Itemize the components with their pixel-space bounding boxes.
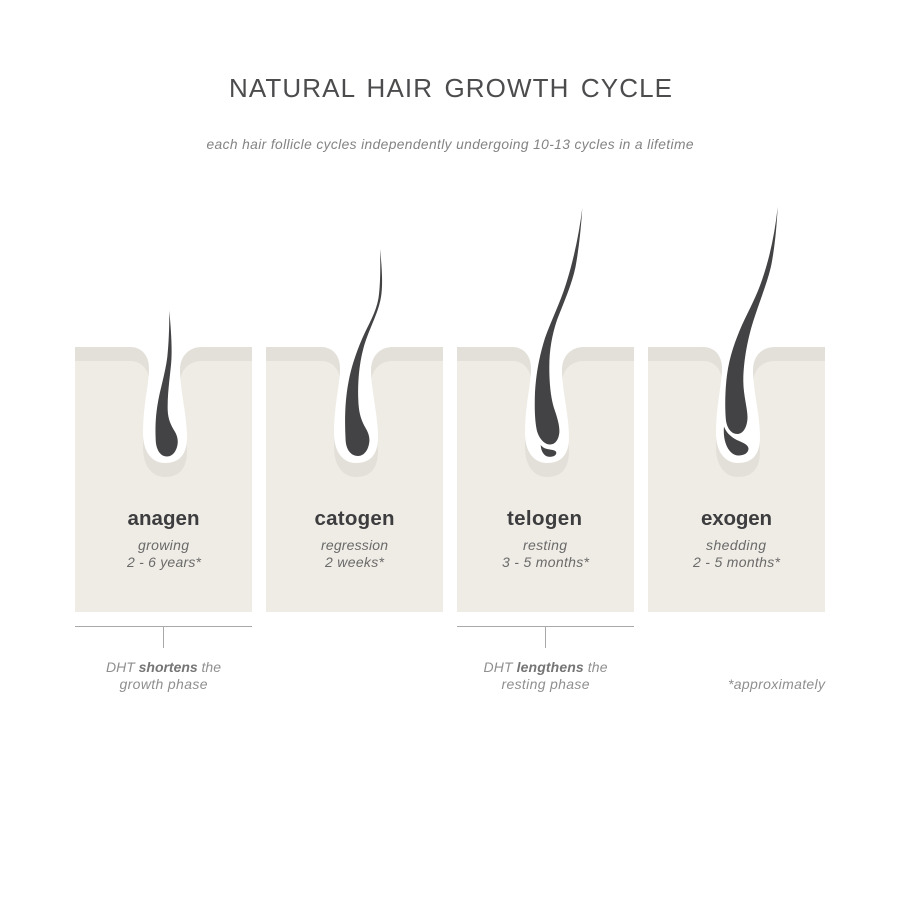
icon: exogen hair bbox=[725, 207, 778, 434]
panel: catogen bbox=[266, 249, 443, 612]
callout: DHT lengthens: DHT lengthens the bbox=[484, 659, 608, 675]
label: catogen description: regression bbox=[321, 537, 388, 553]
callout: growth phase: growth phase bbox=[120, 676, 208, 692]
label: anagen description: growing bbox=[138, 537, 189, 553]
label: exogen name: exogen bbox=[701, 507, 772, 530]
label: catogen duration: 2 weeks* bbox=[324, 554, 385, 570]
subtitle: each hair follicle cycles independently undergoing 10-13 cycles in a lifetime bbox=[206, 137, 694, 152]
panel: exogen bbox=[648, 207, 825, 612]
label: telogen duration: 3 - 5 months* bbox=[502, 554, 590, 570]
callout: DHT shortens: DHT shortens the bbox=[106, 659, 221, 675]
bracket: anagen bbox=[75, 626, 252, 648]
label: catogen name: catogen bbox=[314, 507, 394, 530]
label: exogen description: shedding bbox=[706, 537, 766, 553]
icon: telogen hair bbox=[535, 208, 582, 444]
title: NATURAL HAIR GROWTH CYCLE bbox=[229, 73, 672, 103]
footnote: *approximately bbox=[728, 676, 826, 692]
label: anagen duration: 2 - 6 years* bbox=[126, 554, 202, 570]
label: telogen name: telogen bbox=[507, 507, 582, 530]
icon: catogen hair bbox=[345, 249, 382, 456]
icon: telogen club root bbox=[541, 445, 556, 457]
panel: telogen bbox=[457, 208, 634, 612]
icon: exogen shed hair bbox=[724, 426, 748, 456]
label: telogen description: resting bbox=[523, 537, 567, 553]
callout: resting phase: resting phase bbox=[502, 676, 590, 692]
bracket: telogen bbox=[457, 626, 634, 648]
label: exogen duration: 2 - 5 months* bbox=[692, 554, 781, 570]
label: anagen name: anagen bbox=[128, 507, 200, 530]
icon: anagen hair bbox=[155, 310, 178, 456]
panel: anagen bbox=[75, 310, 252, 612]
